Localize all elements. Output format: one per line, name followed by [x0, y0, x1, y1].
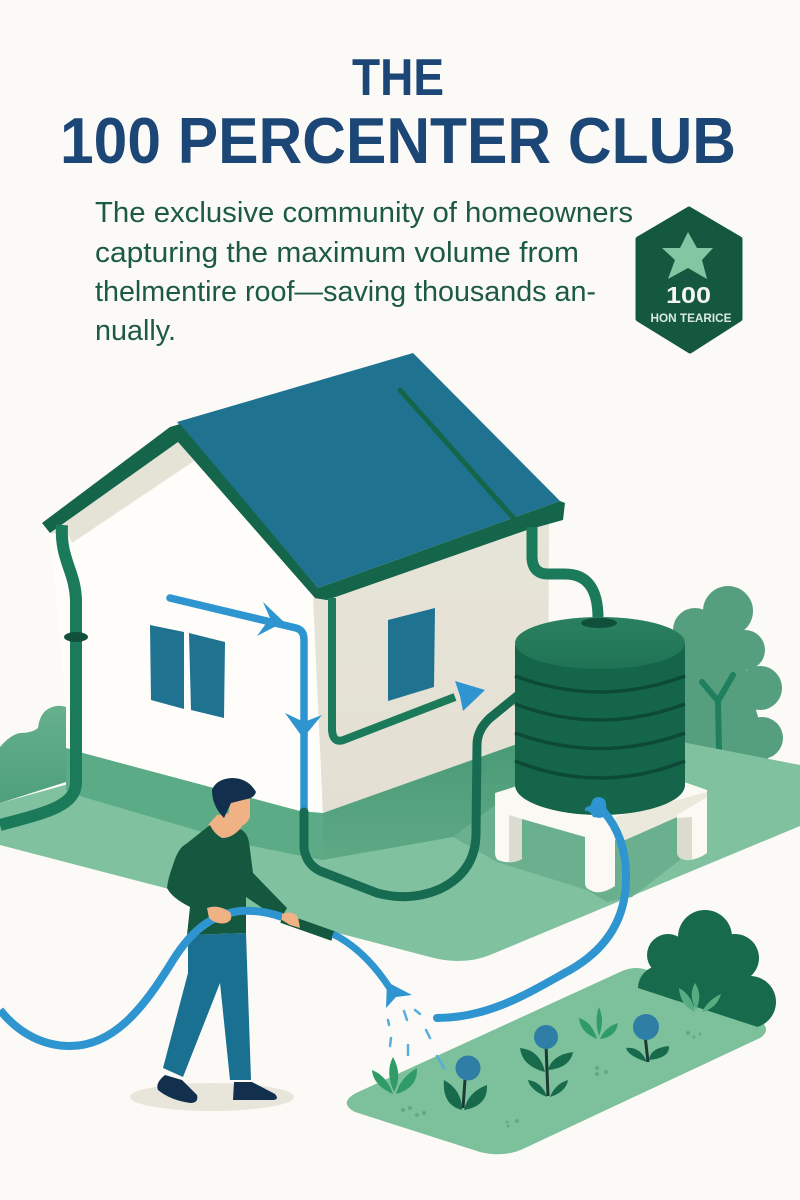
right wall pipe to tank	[332, 598, 455, 741]
ground shadow	[130, 1083, 294, 1111]
stand centre leg	[585, 835, 615, 892]
subtitle text block	[95, 197, 633, 347]
arrow: flow right	[257, 602, 284, 636]
tank hole	[581, 618, 617, 628]
pipe clamp	[64, 632, 88, 642]
tank bands	[515, 676, 685, 778]
dark bush	[638, 910, 776, 1028]
rain tank	[515, 617, 685, 815]
tank top	[515, 617, 685, 669]
roof	[177, 353, 560, 588]
house	[42, 353, 565, 860]
right foundation strip	[322, 743, 545, 860]
shadow under tank stand	[322, 743, 695, 902]
title: 100 PERCENTER CLUB	[60, 104, 736, 177]
bush sprout	[679, 983, 721, 1012]
badge caption: HON TEARICE	[650, 311, 732, 325]
eave fascia	[315, 501, 565, 600]
roof ridge gutter	[400, 390, 517, 522]
neck	[208, 812, 242, 840]
arrow: into tank	[455, 681, 485, 711]
left foundation strip	[66, 748, 323, 860]
title	[60, 49, 736, 177]
subtitle text block: thelmentire roof—saving thousands an-	[95, 276, 596, 308]
badge number: 100	[666, 282, 711, 308]
tank spigot	[585, 797, 607, 818]
garden bed	[347, 968, 766, 1154]
gable fascia	[42, 424, 327, 600]
shoes	[157, 1075, 277, 1103]
tree trunk	[702, 675, 733, 750]
right window	[388, 608, 435, 701]
tank stand	[495, 760, 707, 892]
plant 1	[372, 1057, 417, 1094]
blue flow line with arrows	[170, 598, 322, 812]
hose end	[333, 934, 391, 990]
hose in hand	[0, 911, 282, 1046]
flower 3	[626, 1014, 669, 1062]
plant 2	[579, 1007, 618, 1039]
flower 1	[444, 1056, 487, 1110]
face	[228, 797, 250, 827]
tank body	[515, 645, 685, 815]
right wall	[313, 515, 549, 813]
stand left leg	[495, 793, 522, 862]
left downpipe	[0, 525, 88, 825]
left wall	[50, 442, 323, 813]
watering plants and flowers	[372, 1007, 702, 1128]
arrow: flow down	[285, 713, 322, 738]
subtitle text block: capturing the maximum volume from	[95, 237, 579, 269]
badge: 100 percenter	[638, 209, 740, 351]
right downpipe to tank top	[532, 527, 598, 618]
icon: star	[662, 232, 713, 279]
subtitle text block: nually.	[95, 315, 176, 347]
flower 2	[520, 1025, 573, 1097]
sprayer head	[386, 982, 412, 1008]
hose nozzle grip	[282, 918, 333, 936]
hair	[212, 778, 256, 818]
blue hose from tank to garden	[437, 797, 626, 1018]
ground lawn	[0, 700, 800, 961]
tree behind tank	[673, 586, 783, 770]
title: THE	[352, 49, 444, 107]
bush left of house	[0, 706, 66, 803]
man with hose	[0, 778, 444, 1111]
gable shadow	[50, 442, 194, 543]
hands	[207, 907, 231, 923]
water droplets	[388, 1010, 444, 1068]
green overflow pipe	[304, 692, 522, 897]
subtitle text block: The exclusive community of homeowners	[95, 197, 633, 229]
grass specks	[401, 1031, 702, 1128]
left window	[150, 625, 225, 718]
pants	[163, 933, 251, 1080]
sweater	[167, 825, 287, 935]
stand right leg	[677, 797, 707, 860]
